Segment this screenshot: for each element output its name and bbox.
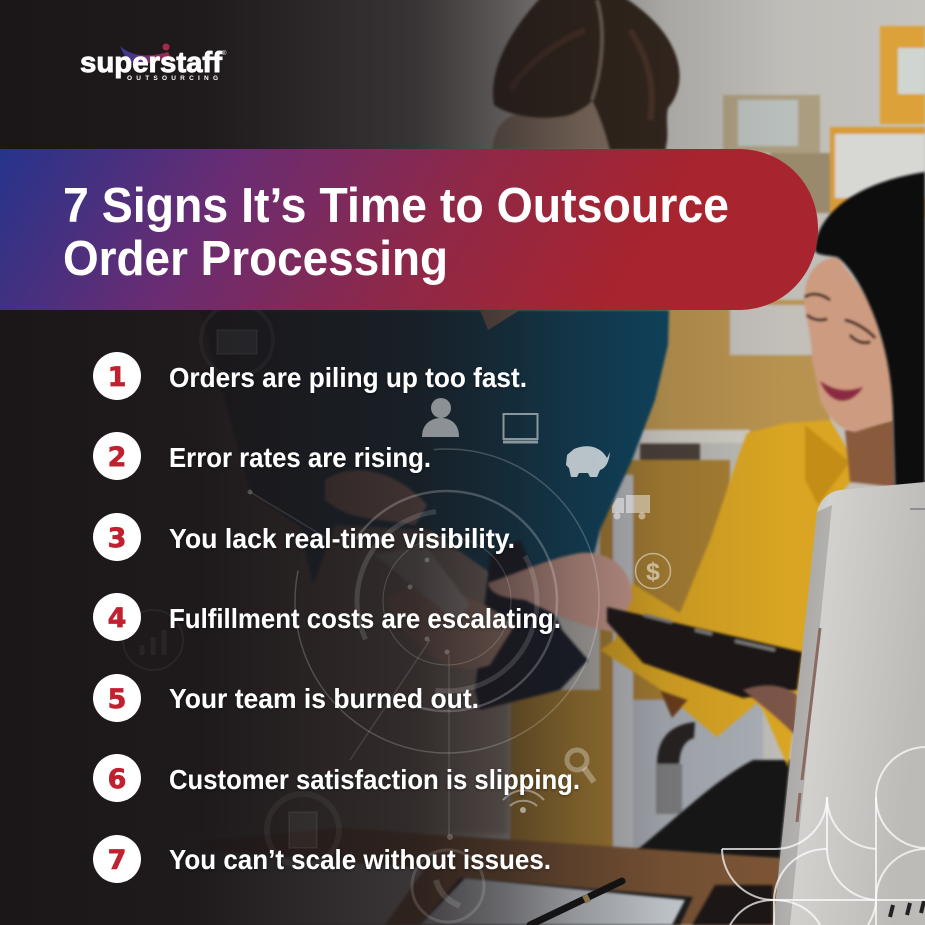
stacked cardboard boxes (510, 26, 925, 860)
monitor (773, 482, 925, 925)
icon: bar chart circle (123, 610, 183, 670)
decorative outline pattern bottom right (722, 747, 925, 925)
woman two: eyes and brows (805, 294, 875, 343)
woman two: neck (845, 420, 895, 487)
sign 5: 5 (108, 684, 126, 715)
woman one: hands with tablet (325, 470, 515, 669)
list of seven signs (93, 352, 580, 883)
woman one: hair (493, 0, 680, 150)
hand under tablet (743, 685, 797, 735)
woman one: forehead (492, 95, 668, 150)
woman one: skin at collar (480, 310, 520, 330)
woman one: beige trousers and coat (180, 430, 510, 835)
icon: clipboard circle (267, 794, 339, 866)
woman two: black hair (815, 172, 925, 492)
sign 3 (93, 513, 515, 561)
sign 2: Error rates are rising. (169, 442, 431, 473)
sign 7: 7 (108, 845, 126, 876)
logo: superstaff outsourcing (80, 44, 227, 82)
sign 1: 1 (108, 362, 126, 393)
icon: delivery truck (612, 495, 650, 520)
black bag (637, 760, 790, 860)
icon: wifi (503, 790, 544, 813)
papers on desk (200, 850, 425, 925)
icon: dollar coin (636, 554, 670, 588)
woman two: face (804, 257, 893, 432)
woman one: teal shirt (200, 310, 669, 585)
icon: person (422, 398, 459, 437)
woman one: navy cuff (475, 540, 588, 710)
icon: credit card circle (201, 304, 273, 376)
sign 7: You can’t scale without issues. (169, 844, 551, 875)
pointing hand (488, 553, 632, 632)
sign 4: Fulfillment costs are escalating. (169, 603, 561, 634)
dark device on desk (692, 885, 773, 925)
woman two: yellow jacket (600, 420, 860, 767)
sign 2 (93, 432, 431, 480)
sign 4 (93, 593, 561, 641)
sign 5: Your team is burned out. (169, 683, 479, 714)
chair (656, 722, 695, 814)
icon: phone circle (412, 850, 484, 922)
logo registered mark: ® (222, 50, 227, 57)
logo dot (162, 44, 170, 50)
holographic tech rings (248, 436, 612, 840)
clipboard on desk (420, 878, 693, 925)
logo wordmark: superstaff (80, 47, 222, 79)
icon: computer monitor (503, 414, 538, 442)
title: 7 Signs It’s Time to Outsource (63, 179, 729, 233)
sign 6 (93, 754, 580, 802)
sign 3: 3 (108, 523, 126, 554)
logo swoosh (120, 46, 170, 64)
sign 1: Orders are piling up too fast. (169, 362, 527, 393)
sign 3: You lack real-time visibility. (169, 523, 515, 554)
sign 4: 4 (108, 603, 126, 634)
icon: dollar coin: $ (646, 558, 660, 586)
sign 5 (93, 674, 479, 722)
sign 2: 2 (108, 442, 126, 473)
sign 6: Customer satisfaction is slipping. (169, 764, 580, 795)
sign 7 (93, 835, 551, 883)
pen (530, 881, 622, 925)
title (63, 179, 729, 286)
woman two: smile (820, 381, 863, 401)
title banner (0, 149, 818, 310)
tablet (607, 607, 802, 698)
title: Order Processing (63, 232, 448, 286)
icon: magnifying glass (567, 750, 594, 782)
wooden desk (200, 828, 780, 925)
paper on clipboard (420, 878, 685, 925)
icon: piggy bank (566, 446, 610, 477)
sign 1 (93, 352, 527, 400)
logo subline: OUTSOURCING (127, 75, 218, 82)
sign 6: 6 (108, 764, 126, 795)
